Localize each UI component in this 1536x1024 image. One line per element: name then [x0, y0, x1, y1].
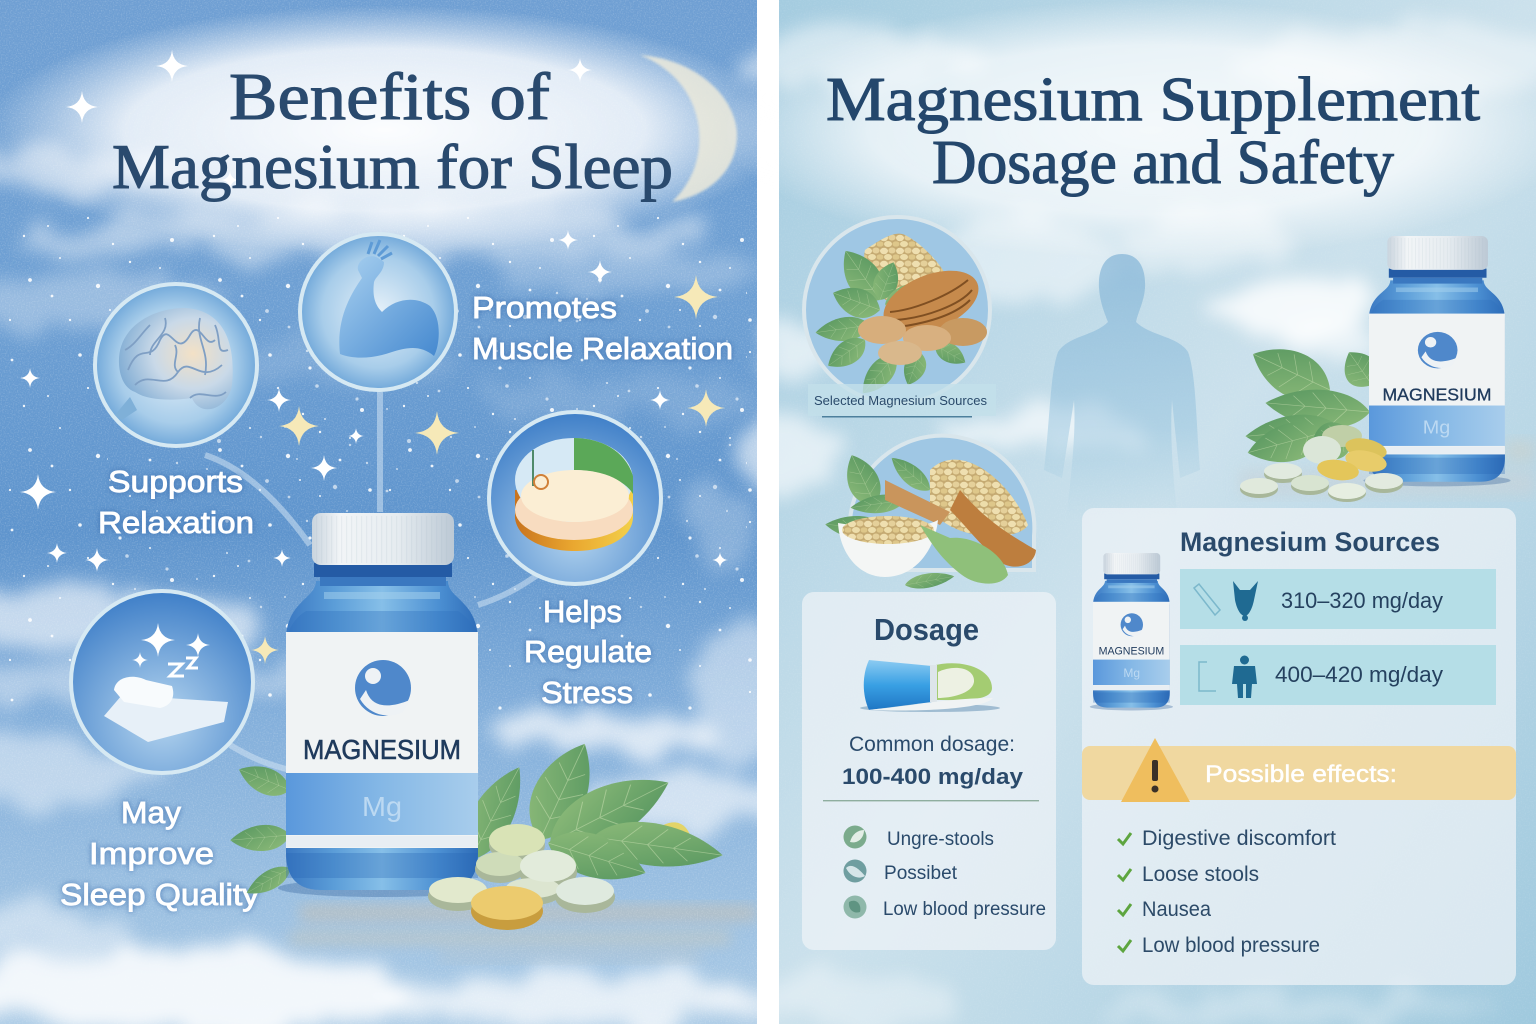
upper bottle: MAGNESIUM: [1382, 384, 1491, 404]
heading: magnesium sources: Magnesium Sources: [1180, 527, 1440, 557]
leaves beside upper bottle: [1243, 335, 1385, 472]
main bottle: [278, 513, 486, 897]
row: male dosage: 400–420 mg/day: [1275, 662, 1443, 687]
row: male dosage: [1180, 645, 1496, 705]
icon: food circle 1: [804, 217, 990, 403]
label: Promotes Muscle Relaxation: [472, 290, 733, 366]
banner: possible effects: Possible effects:: [1205, 761, 1397, 788]
sky floor: [290, 905, 757, 960]
small bottle: MAGNESIUM: [1099, 646, 1164, 658]
icon: food circle 2: [824, 436, 1036, 592]
label: May Improve Sleep Quality: May: [121, 795, 181, 830]
icon: muscle circle: [300, 234, 456, 390]
leaves behind main bottle: [229, 732, 726, 902]
label: Supports Relaxation: [98, 464, 254, 540]
moon: [640, 55, 737, 202]
panel: dosage and safety background: [700, 0, 1536, 1024]
text: common dosage: [842, 733, 1024, 789]
row: female dosage: 310–320 mg/day: [1281, 588, 1443, 613]
label: Promotes Muscle Relaxation: Promotes: [472, 290, 617, 325]
label: May Improve Sleep Quality: Sleep Quality: [60, 877, 260, 912]
label: May Improve Sleep Quality: Improve: [89, 836, 214, 871]
upper bottle: Mg: [1423, 418, 1450, 438]
panel: magnesium sources and effects: [1082, 508, 1516, 985]
text: common dosage: 100-400 mg/day: [842, 764, 1024, 789]
list: dosage notes: Ungre-stools: [887, 829, 994, 850]
divider gap: [757, 0, 779, 1024]
panel: dosage: [802, 592, 1056, 950]
title: Magnesium Supplement Dosage and Safety: Magnesium Supplement: [826, 66, 1480, 134]
small bottle: Mg: [1123, 666, 1140, 680]
list: dosage notes: Possibet: [884, 863, 958, 884]
label: Helps Regulate Stress: Stress: [541, 675, 633, 710]
silhouette: human body: [1044, 254, 1200, 520]
list: possible effects: Nausea: [1142, 898, 1211, 921]
label: Promotes Muscle Relaxation: Muscle Relaxation: [472, 331, 733, 366]
icon: dish circle: [489, 412, 661, 584]
label: Supports Relaxation: Supports: [108, 464, 243, 499]
list: possible effects: Low blood pressure: [1142, 934, 1320, 957]
list: dosage notes: Low blood pressure: [883, 899, 1046, 920]
connector lines: [205, 392, 545, 770]
title: Magnesium Supplement Dosage and Safety: [826, 66, 1480, 197]
label: Helps Regulate Stress: Helps: [543, 594, 622, 629]
panel: benefits background: [0, 0, 790, 1024]
list: possible effects: Loose stools: [1142, 863, 1259, 886]
pills beside upper bottle: [1240, 425, 1403, 502]
text: common dosage: Common dosage:: [849, 733, 1015, 756]
title: Magnesium Supplement Dosage and Safety: Dosage and Safety: [932, 129, 1394, 197]
title: Benefits of Magnesium for Sleep: Magnesium for Sleep: [112, 132, 673, 202]
caption: Selected Magnesium Sources: Selected Magnesium Sources: [814, 393, 987, 408]
list: possible effects: Digestive discomfort: [1142, 827, 1336, 850]
small bottle: [1090, 553, 1173, 710]
label: Helps Regulate Stress: [524, 594, 652, 710]
main bottle: MAGNESIUM: [303, 734, 461, 765]
row: female dosage: [1180, 569, 1496, 629]
list: dosage notes: [844, 826, 1046, 920]
title: Benefits of Magnesium for Sleep: Benefits of: [229, 60, 551, 134]
label: May Improve Sleep Quality: [60, 795, 260, 912]
label: Helps Regulate Stress: Regulate: [524, 634, 652, 669]
title: Benefits of Magnesium for Sleep: [112, 60, 673, 202]
pills: [428, 824, 615, 930]
icon: brain circle: [95, 284, 257, 446]
stars: [20, 50, 728, 664]
upper bottle: [1363, 236, 1511, 486]
banner: possible effects: [1082, 738, 1516, 802]
main bottle: Mg: [362, 791, 402, 822]
caption: Selected Magnesium Sources: [808, 384, 996, 418]
list: possible effects: [1118, 827, 1336, 957]
icon: supplement tube: [860, 660, 1000, 712]
icon: sleep circle: [71, 591, 253, 773]
heading: dosage: Dosage: [874, 612, 979, 647]
label: Supports Relaxation: Relaxation: [98, 505, 254, 540]
